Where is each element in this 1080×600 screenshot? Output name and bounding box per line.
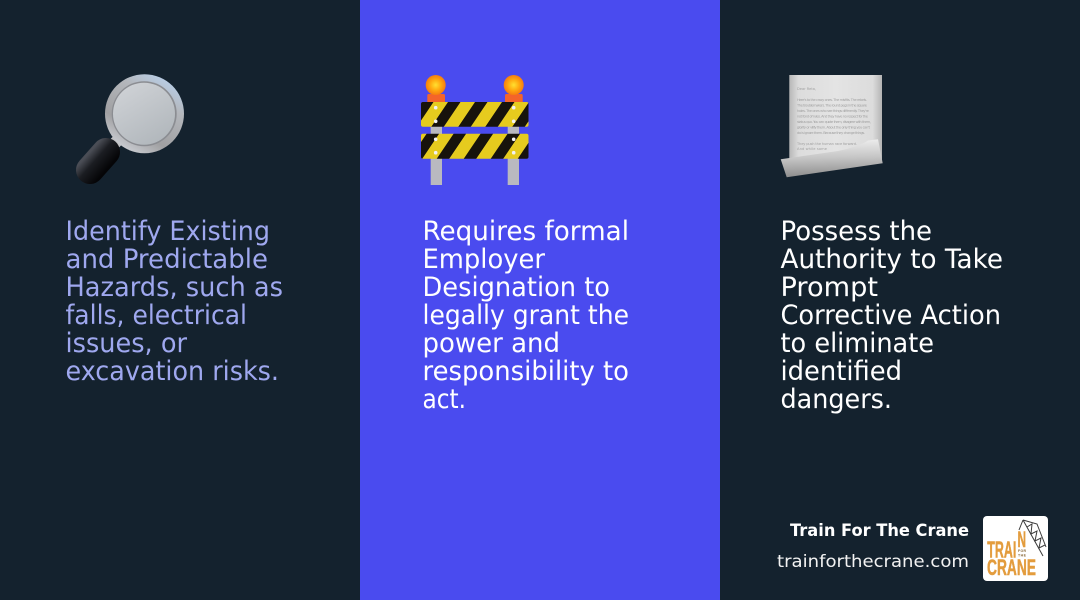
text: employer designation: Employer xyxy=(422,244,546,275)
text: corrective action: Prompt xyxy=(780,272,878,303)
text: corrective action: Possess the xyxy=(780,216,932,247)
text: identify hazards: falls, electrical xyxy=(66,300,247,331)
logo: train for the crane xyxy=(983,516,1048,581)
text: employer designation: responsibility to xyxy=(422,356,629,387)
icon: curled document: not fond of rules. And they have no respect for the xyxy=(797,114,869,118)
icon: magnifying glass xyxy=(90,74,184,170)
icon: curled document: glorify or vilify them. About the only thing you can't xyxy=(797,126,871,130)
icon: curled document xyxy=(781,75,883,177)
logo: train for the crane: FOR xyxy=(1018,549,1026,553)
icon: curled document: status quo. You can quote them, disagree with them, xyxy=(797,120,871,124)
text: corrective action: Corrective Action xyxy=(780,300,1001,331)
brand name: Train For The Crane xyxy=(790,521,969,541)
text: employer designation: Designation to xyxy=(422,272,610,303)
icon: road barrier xyxy=(421,75,528,185)
text: employer designation: act. xyxy=(422,384,466,415)
icon: curled document: The troublemakers. The round pegs in the square xyxy=(796,104,868,108)
panel: corrective action xyxy=(720,0,1080,600)
text: employer designation: legally grant the xyxy=(422,300,629,331)
icon: curled document: holes. The ones who see things differently. They're xyxy=(797,109,870,113)
text: corrective action: Authority to Take xyxy=(780,244,1003,275)
brand url: trainforthecrane.com xyxy=(777,552,969,572)
logo: train for the crane: CRANE xyxy=(987,555,1036,580)
text: corrective action: dangers. xyxy=(780,384,892,415)
logo: train for the crane: TRAI xyxy=(987,536,1016,562)
icon: curled document: do is ignore them. Because they change things. xyxy=(797,131,865,135)
text: identify hazards: Hazards, such as xyxy=(66,272,283,303)
text: identify hazards: excavation risks. xyxy=(66,356,279,387)
logo: train for the crane: N xyxy=(1018,527,1026,552)
panel: identify hazards xyxy=(0,0,360,600)
text: identify hazards: Identify Existing xyxy=(66,216,270,247)
text: corrective action: identified xyxy=(780,356,902,387)
icon: curled document: Dear Reta, xyxy=(797,87,816,91)
icon: curled document: Here's to the crazy ones. The misfits. The rebels. xyxy=(797,98,867,102)
text: corrective action: to eliminate xyxy=(780,328,934,359)
icon: curled document: They push the human race forward. xyxy=(796,142,857,146)
icon: curled document: And while some xyxy=(797,147,828,151)
panel: employer designation xyxy=(360,0,720,600)
text: employer designation: Requires formal xyxy=(422,216,629,247)
text: identify hazards: issues, or xyxy=(66,328,188,359)
logo: train for the crane: THE xyxy=(1018,554,1027,558)
text: identify hazards: and Predictable xyxy=(66,244,268,275)
text: employer designation: power and xyxy=(422,328,560,359)
